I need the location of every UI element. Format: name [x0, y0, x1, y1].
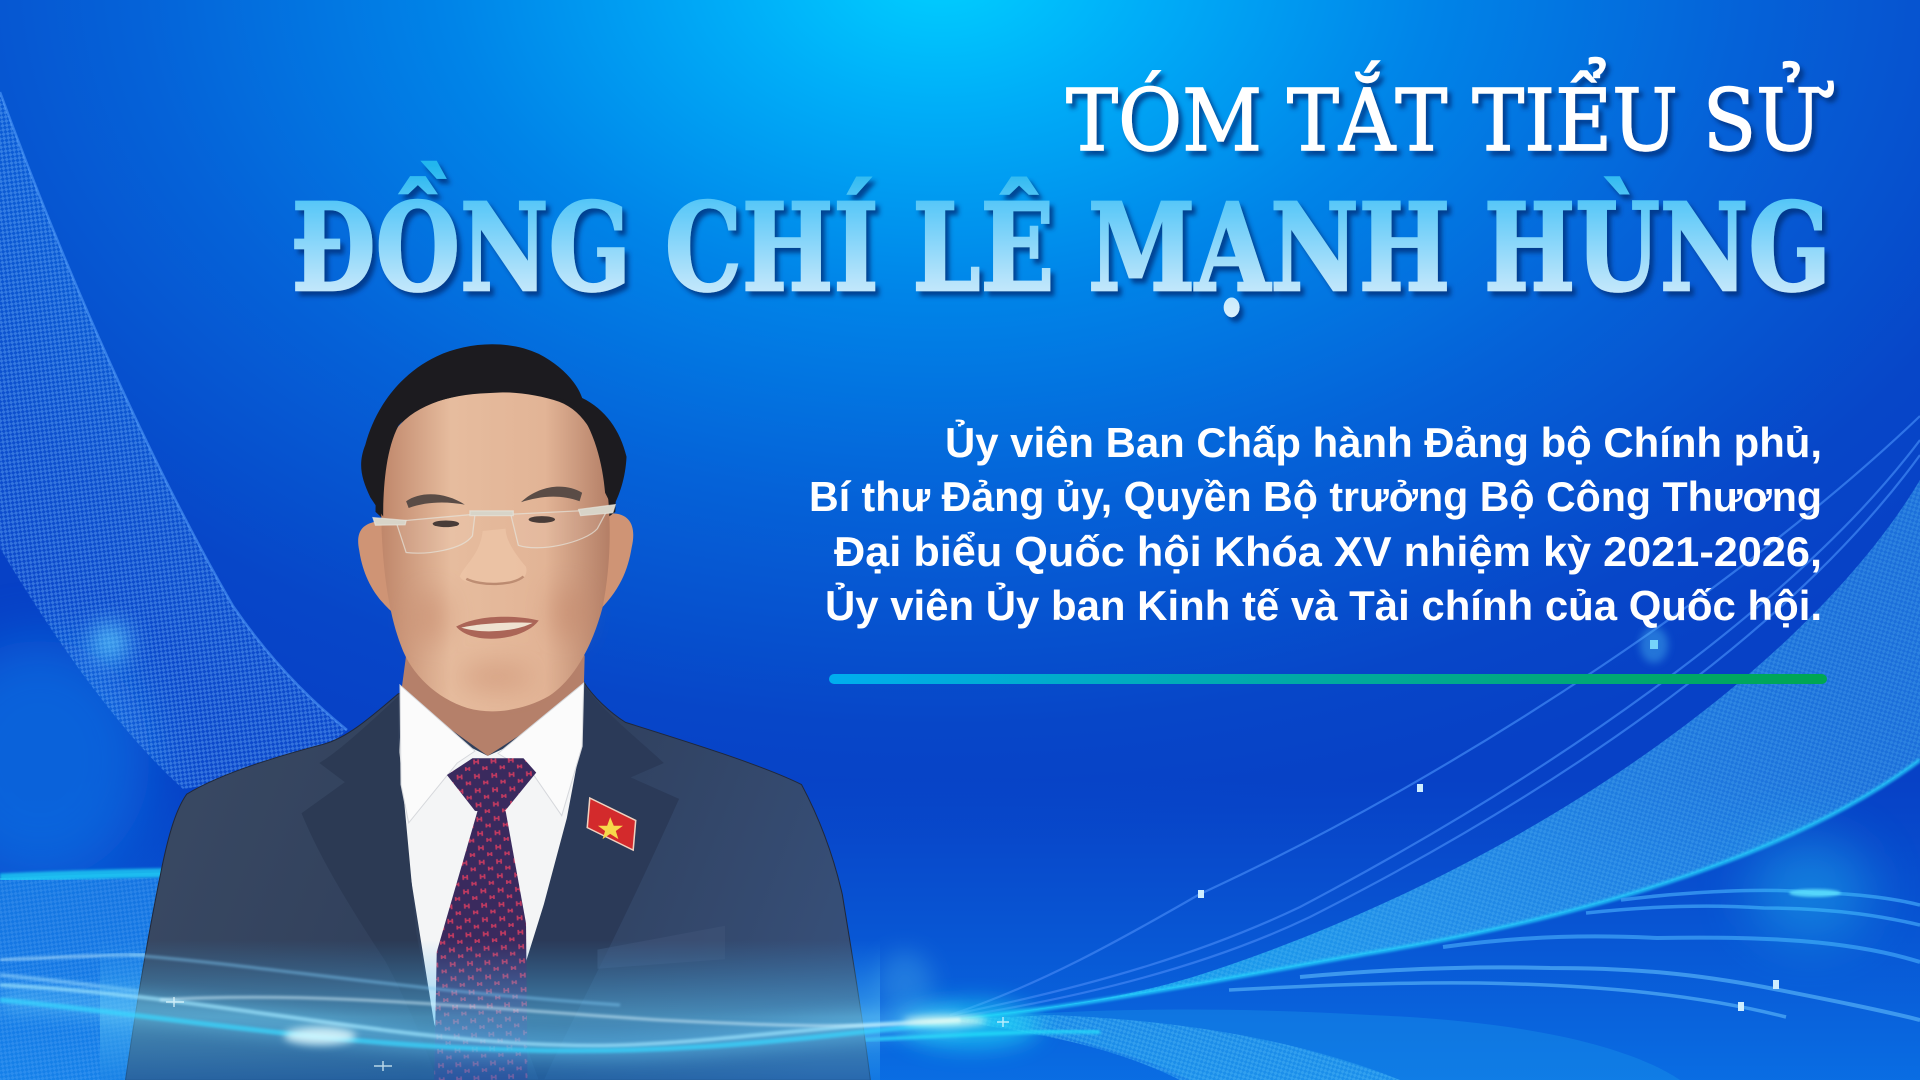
suit jacket [126, 682, 870, 1080]
face shading [416, 584, 582, 689]
positions text block: Ủy viên Ban Chấp hành Đảng bộ Chính phủ, [945, 418, 1822, 466]
necktie [434, 758, 536, 1080]
breast pocket [597, 926, 725, 969]
shirt [398, 713, 582, 1080]
right glow [1750, 840, 1870, 940]
bottom-right ribbon [860, 951, 1680, 1080]
national assembly flag pin [587, 798, 636, 850]
right ribbon wave [950, 480, 1920, 1020]
bottom-left ribbon [0, 868, 340, 1080]
mouth [456, 617, 539, 639]
portrait of Lê Mạnh Hùng [126, 344, 870, 1080]
glasses [373, 505, 615, 553]
positions text block: Ủy viên Ủy ban Kinh tế và Tài chính của Quốc hội. [825, 581, 1822, 629]
background lower glow [0, 780, 1920, 1080]
positions text block: Đại biểu Quốc hội Khóa XV nhiệm kỳ 2021-2026, [834, 528, 1822, 575]
left lapel [302, 696, 437, 1080]
left mesh ribbon [0, 92, 347, 789]
ears [358, 513, 633, 617]
right lapel [518, 686, 679, 1080]
positions text block [809, 418, 1822, 629]
positions text block: Bí thư Đảng ủy, Quyền Bộ trưởng Bộ Công Thương [809, 473, 1822, 520]
head base under hairline [376, 378, 616, 521]
title line: TÓM TẮT TIỂU SỬ [1066, 58, 1833, 171]
divider rule [829, 674, 1827, 684]
light wash over lower portrait [100, 940, 880, 1080]
shirt collar [400, 683, 584, 823]
left side glow [0, 640, 150, 880]
sparkle dots [1198, 627, 1779, 1011]
foreground glow waves [0, 955, 987, 1051]
eyebrows [406, 487, 582, 508]
eyes [433, 516, 555, 527]
face [381, 392, 610, 711]
sparkle stars [166, 997, 1009, 1071]
thin arc lines [950, 416, 1920, 1020]
neck [401, 655, 585, 756]
nose [460, 529, 526, 584]
hair [361, 344, 627, 517]
